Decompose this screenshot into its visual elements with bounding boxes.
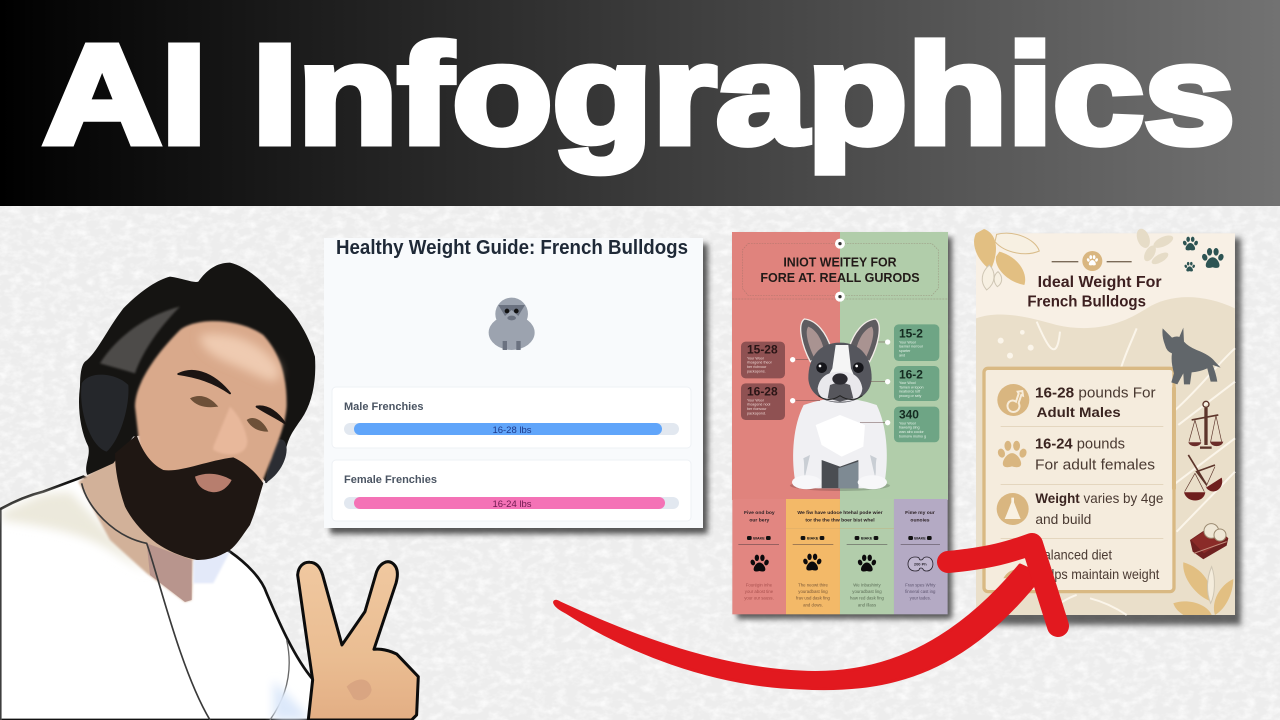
icon: tilted scale	[1184, 455, 1222, 501]
decoration: leaves top left	[974, 229, 1039, 290]
icon: balance scale	[1188, 401, 1223, 448]
column headings: our bery	[749, 518, 770, 524]
person with headphones	[0, 263, 418, 720]
panel: red and green infographic	[732, 232, 952, 619]
heading: FORE AT. REALL GURODS	[760, 271, 920, 285]
column notes: Fourégin inhe	[746, 582, 773, 587]
callout: 16-2: 16-2	[899, 367, 923, 381]
column notes: frav usd dask fing	[796, 596, 831, 601]
row: weight varies: and build	[1035, 511, 1091, 527]
callout: 340: wan alro coolor	[899, 430, 925, 434]
headphone cable	[82, 483, 210, 720]
face	[135, 321, 287, 497]
content box	[984, 368, 1174, 592]
column notes: your abost tine	[745, 589, 774, 594]
card: female: 16-24 lbs	[492, 499, 532, 510]
icon: French bulldog	[790, 319, 890, 491]
row: weight varies: Weight varies by 4ge	[1035, 490, 1164, 506]
column headings	[744, 510, 935, 524]
callout: 15-28: 15-28	[747, 343, 778, 357]
callout: 15-2: and	[899, 353, 905, 357]
hand	[298, 562, 418, 720]
hair and headphones	[79, 263, 315, 483]
callout: 15-28: ber richvour	[747, 365, 767, 369]
callout: 15-28: packapons.	[747, 369, 766, 373]
neck	[78, 457, 230, 602]
column notes: The neowt thire	[798, 582, 828, 587]
column badges	[747, 536, 932, 541]
row: 16-28 pounds: 16-28 pounds For	[1035, 386, 1156, 402]
callout: 16-28	[741, 383, 785, 420]
callout: 16-28: Your Wool	[747, 398, 764, 402]
heading: INIOT WEITEY FOR	[783, 256, 897, 270]
callout: 16-2	[894, 366, 939, 401]
background blobs	[976, 297, 1235, 615]
heading	[760, 256, 920, 285]
callout: 15-2: sparter	[899, 349, 911, 353]
shirt	[0, 477, 320, 720]
column notes: and dows.	[803, 602, 823, 607]
callout: 16-2: Your Wool	[899, 381, 916, 385]
card: male: 16-28 lbs	[492, 425, 532, 436]
column badges: BIAKE	[753, 537, 765, 541]
card: male: Male Frenchies	[344, 401, 423, 413]
row: 16-28 pounds: Adult Males	[1037, 404, 1121, 420]
row: weight varies	[997, 490, 1164, 527]
card: female: Female Frenchies	[344, 474, 437, 486]
column headings: tor the the thw boer bist whel	[805, 518, 875, 524]
heading: French Bulldogs	[1027, 294, 1146, 311]
header banner	[0, 0, 1280, 206]
icons: teal paws	[986, 237, 1224, 612]
column headings: ounoies	[910, 518, 930, 524]
title frame	[742, 243, 938, 296]
icon: simple dog	[489, 298, 535, 350]
column notes: Fran spes Whty	[905, 582, 936, 587]
callout: 340: 340	[899, 408, 919, 422]
column headings: Five ond boy	[744, 510, 775, 516]
icon: treat tin	[1190, 524, 1228, 559]
callout: 15-28: Your Wool	[747, 356, 764, 360]
column badges: BIAKE	[861, 537, 873, 541]
callout: 16-2: neaborce lotf	[899, 390, 921, 394]
callouts with leader lines	[793, 342, 888, 423]
callout: 340: Your Wool	[899, 421, 916, 425]
icon: 200 Ph badge: 200 Ph	[914, 562, 927, 567]
callout: 340	[894, 407, 939, 442]
column notes: haw red dask fing	[850, 596, 885, 601]
column notes: youradbast ling	[798, 589, 828, 594]
column headings: Fime my our	[905, 510, 935, 516]
column badges: BIAKE	[914, 537, 926, 541]
decoration: leaves bottom right	[1173, 562, 1233, 615]
callout: 16-28: packapond.	[747, 411, 766, 415]
heading: Ideal Weight For	[1038, 274, 1162, 291]
header ornament	[1052, 251, 1132, 271]
row: 16-28 pounds	[997, 384, 1156, 420]
decoration: faint leaves	[1134, 227, 1175, 266]
column headings: We fiw have udoce htehal pode wier	[797, 510, 883, 516]
bottom columns	[732, 499, 948, 614]
callout: 15-2: Your Wool	[899, 340, 916, 344]
row: 16-24 pounds: For adult females	[1035, 457, 1155, 473]
callout: 15-2: laemer nerrour	[899, 345, 924, 349]
panel: plain weight guide	[324, 237, 708, 534]
callout: 16-28: 16-28	[747, 384, 778, 398]
row: balanced diet: Balanced diet	[1035, 546, 1112, 562]
heading	[1027, 274, 1162, 311]
callout: 340: bomorw molno g	[899, 434, 926, 438]
title: AI Infographics	[43, 15, 1235, 173]
panel: cream infographic	[974, 227, 1241, 625]
beard	[115, 435, 263, 560]
column notes: youradbast ling	[852, 589, 882, 594]
textured wall background	[0, 206, 1280, 720]
row: balanced diet	[1003, 546, 1159, 582]
icons: paws	[750, 554, 877, 571]
row: 16-24 pounds: 16-24 pounds	[1035, 436, 1125, 452]
callout: 16-2: proorg or sely	[899, 394, 922, 398]
callout: 16-28: ber rlonvour	[747, 407, 767, 411]
column notes: your tades.	[910, 596, 931, 601]
column notes: your our sauss.	[744, 596, 774, 601]
column notes: We Inbashinty	[853, 582, 881, 587]
row: 16-24 pounds	[997, 436, 1155, 473]
callout: 15-2: 15-2	[899, 326, 923, 340]
callout: 16-28: rhoagené nool	[747, 403, 771, 407]
callout: 15-28: rhoagené theor	[747, 361, 773, 365]
callout: 16-2: Tamen w lopon	[899, 385, 924, 389]
column notes	[744, 582, 936, 607]
callout: 15-2	[894, 324, 939, 361]
card: male	[332, 387, 691, 448]
callout: 15-28	[741, 342, 785, 378]
column badges: BIAKE	[807, 537, 819, 541]
heading: Healthy Weight Guide: French Bulldogs	[336, 237, 688, 259]
column notes: finneral cast ing	[905, 589, 936, 594]
column notes: and Illass	[858, 602, 876, 607]
eyebrows and eyes	[178, 371, 285, 423]
icon: gray dog	[1162, 328, 1221, 384]
card: female	[332, 460, 691, 521]
row: balanced diet: Helps maintain weight	[1035, 566, 1159, 582]
arrow: red curve	[555, 544, 1058, 689]
icon: 200 Ph badge	[908, 557, 933, 571]
callout: 340: hawarig sing	[899, 426, 920, 430]
